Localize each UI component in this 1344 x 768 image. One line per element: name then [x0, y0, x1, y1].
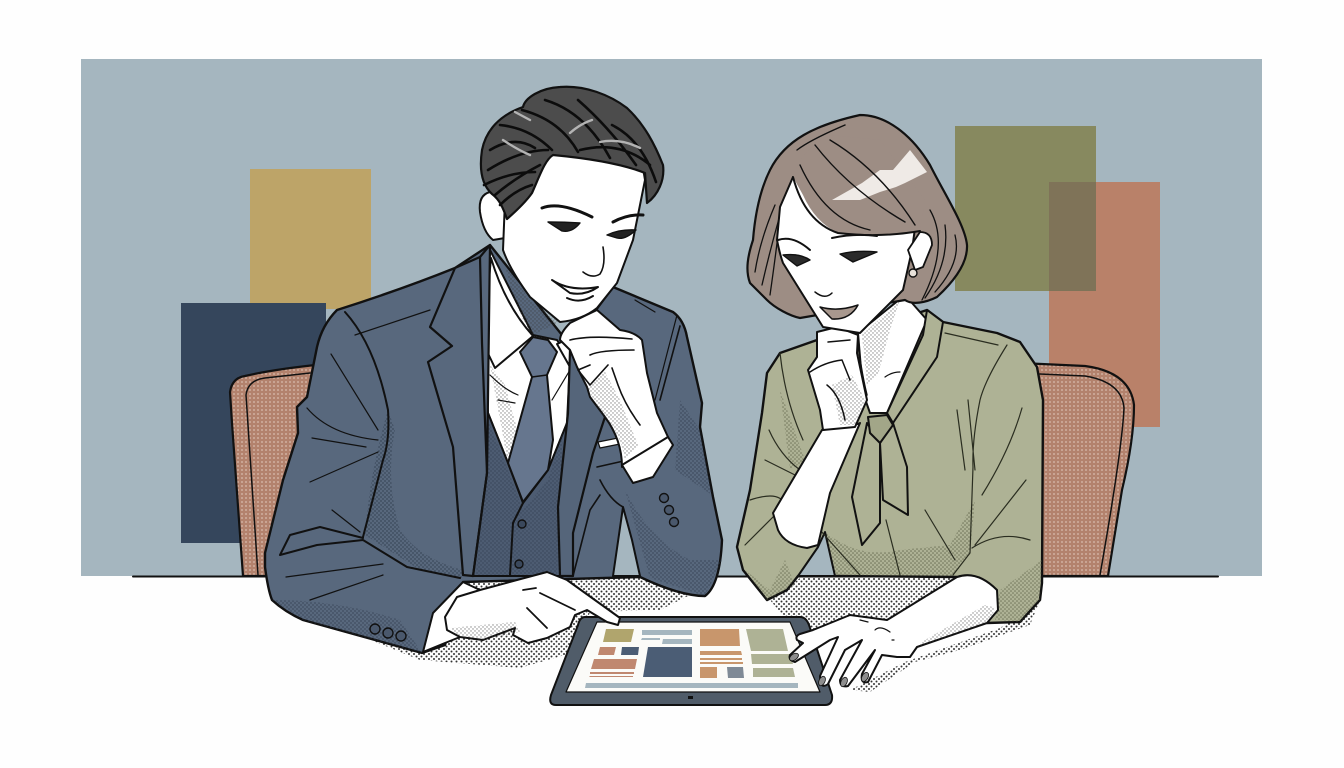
woman: hand shading [832, 375, 865, 425]
man: shirt [483, 250, 570, 503]
colour block: terracotta [1049, 182, 1160, 427]
man: hand [445, 572, 620, 643]
man: gap between jacket and sleeve [613, 507, 640, 576]
woman: brows [778, 235, 877, 250]
man: shirt folds [490, 370, 570, 403]
woman: bang strands [797, 125, 915, 230]
woman: blouse [737, 310, 1043, 623]
woman: chest [858, 295, 927, 413]
man: hair highlights [503, 112, 640, 155]
woman: knuckle lines [860, 620, 894, 640]
woman: nose [815, 292, 832, 296]
man: chin hand [560, 310, 668, 467]
tablet: screen [566, 622, 820, 692]
woman: finger nails [788, 652, 870, 688]
colour block: navy [181, 303, 326, 543]
tablet [550, 617, 832, 705]
colour block: ochre [250, 169, 371, 309]
man: pocket square [598, 437, 625, 448]
woman: blouse shading [745, 390, 1042, 622]
man: jacket front panel edges [573, 326, 680, 576]
man: vest texture [476, 420, 563, 575]
man: ear [480, 192, 505, 240]
woman [737, 115, 1043, 623]
man: jacket shading [272, 400, 722, 653]
tablet: ui block, navy chart [643, 647, 692, 677]
woman: chest line [885, 372, 900, 377]
tablet: ui bar, footer [585, 683, 798, 688]
chair: right [1020, 363, 1134, 576]
background panel [81, 59, 1262, 576]
woman: neck shadow [862, 300, 900, 385]
man: fingers [570, 337, 640, 425]
tablet: ui blocks, orange column [700, 629, 743, 678]
man: shirt cuff [423, 582, 480, 652]
woman: lips [820, 305, 858, 319]
woman: hair back [747, 115, 967, 318]
man: tie knot line [532, 375, 547, 377]
man: face [503, 150, 645, 322]
woman: arm shape [790, 575, 998, 686]
woman: hair highlight [832, 150, 927, 200]
man [265, 87, 722, 653]
woman: bow knot [868, 415, 893, 443]
woman: bow tail left [852, 423, 880, 545]
woman: bow tail right [880, 423, 908, 515]
woman: earring [909, 269, 917, 277]
man: jacket silhouette [265, 245, 722, 653]
man: hair [481, 87, 663, 219]
woman: collar band [887, 310, 943, 423]
tablet: camera [688, 696, 693, 699]
woman: chin hand [808, 327, 867, 430]
woman: blouse folds [745, 333, 1030, 575]
man: knuckles [523, 588, 575, 628]
tablet: ui blocks, sage column [746, 629, 795, 677]
man: tie [508, 337, 557, 502]
woman: arm and hand on tablet [788, 575, 998, 688]
woman: face [777, 177, 915, 333]
tablet: body [550, 617, 832, 705]
woman: ear [908, 232, 932, 270]
man: eyes [548, 222, 636, 238]
woman: forearm [773, 423, 860, 548]
chair: left [230, 364, 325, 576]
man: pointing hand and cuff [423, 572, 620, 652]
colour block: overlap [1049, 182, 1096, 291]
man: shirt collar [483, 258, 572, 368]
colour block: olive [955, 126, 1096, 291]
woman: hair strands back [755, 205, 956, 300]
man: hand shading [587, 372, 638, 460]
tablet: ui block, slate [727, 667, 744, 678]
man: vest [473, 413, 567, 576]
woman: arm shading [917, 605, 996, 647]
man: nose [583, 247, 604, 276]
man: hand shading [450, 622, 520, 640]
man: brows [542, 206, 643, 222]
tablet: ui blocks, terracotta left [589, 647, 639, 677]
tablet: ui block, olive [603, 629, 634, 642]
table shadow: halftone [268, 578, 1040, 692]
man: vest buttons [515, 520, 526, 568]
man: sleeve lines [280, 300, 677, 600]
woman: bangs edge [793, 177, 920, 235]
woman: eyes [783, 251, 877, 266]
man: mouth [552, 280, 598, 301]
man: left lapel [428, 245, 490, 576]
man: right lapel [558, 350, 605, 576]
table edge [133, 576, 1218, 578]
woman: bangs [793, 135, 925, 236]
man: neck shadow [490, 265, 560, 463]
man: left lapel inner [473, 257, 487, 576]
woman: fingers [810, 340, 867, 420]
table surface [133, 577, 1218, 768]
man: vest front edge [510, 503, 523, 575]
man: sleeve buttons [370, 494, 678, 641]
man: hair strands [484, 100, 656, 205]
man: shirt cuff [622, 437, 673, 483]
woman: gap between sleeve and torso [798, 532, 835, 576]
tablet: ui blocks, text lines [641, 630, 692, 644]
